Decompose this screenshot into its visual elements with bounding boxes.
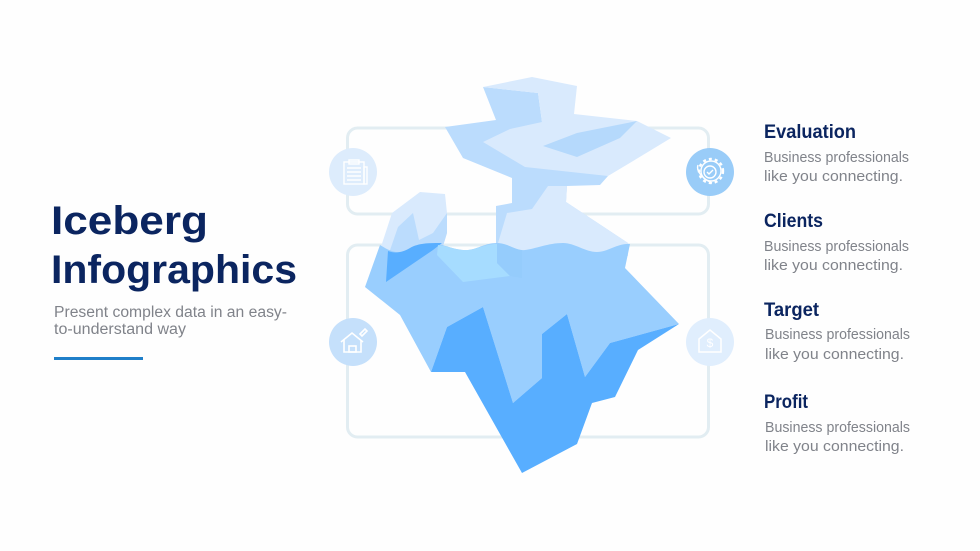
accent line: [54, 357, 143, 360]
submerged deep base: [431, 307, 679, 473]
text block: Profit: Business professionals: [765, 420, 910, 436]
upper ice shadow: [445, 87, 628, 250]
text block: Evaluation: Business professionals: [764, 150, 909, 166]
text block: Evaluation: Evaluation: [764, 122, 856, 143]
text block: Target: [764, 300, 910, 363]
submerged body: [365, 243, 679, 403]
left peak shadow: [388, 213, 447, 256]
inner facet: [543, 121, 637, 157]
icon: house with dollar: [686, 318, 734, 366]
text block: Profit: [764, 392, 910, 455]
title: Infographics: [51, 248, 297, 292]
text block: Target: like you connecting.: [765, 347, 904, 363]
text block: Clients: Business professionals: [764, 239, 909, 255]
icon: house with pencil: [329, 318, 377, 366]
icon: house with dollar: $: [707, 336, 714, 350]
text block: Clients: Clients: [764, 211, 823, 232]
subtitle: to-understand way: [54, 321, 186, 338]
text block: Evaluation: [764, 122, 909, 185]
title: [51, 199, 297, 292]
text block: Clients: like you connecting.: [764, 258, 903, 274]
left small peak: [378, 192, 447, 256]
upper ice highlight: [483, 77, 671, 176]
text block: Profit: like you connecting.: [765, 439, 904, 455]
upper frame: [348, 128, 708, 214]
title: Iceberg: [51, 199, 208, 243]
ice tip highlight: [498, 186, 628, 256]
light cyan facet: [437, 244, 510, 282]
subtitle: [54, 304, 287, 338]
text block: Target: Target: [764, 300, 820, 321]
lower frame: [348, 245, 708, 437]
icon: gear with shield: [686, 148, 734, 196]
subtitle: Present complex data in an easy-: [54, 304, 287, 321]
darker centre facet: [497, 244, 522, 278]
left dark facet: [386, 243, 442, 282]
text block: Evaluation: like you connecting.: [764, 169, 903, 185]
iceberg: [365, 77, 679, 473]
text block: Clients: [764, 211, 909, 274]
text block: Profit: Profit: [764, 392, 809, 413]
text block: Target: Business professionals: [765, 327, 910, 343]
icon: clipboard: [329, 148, 377, 196]
